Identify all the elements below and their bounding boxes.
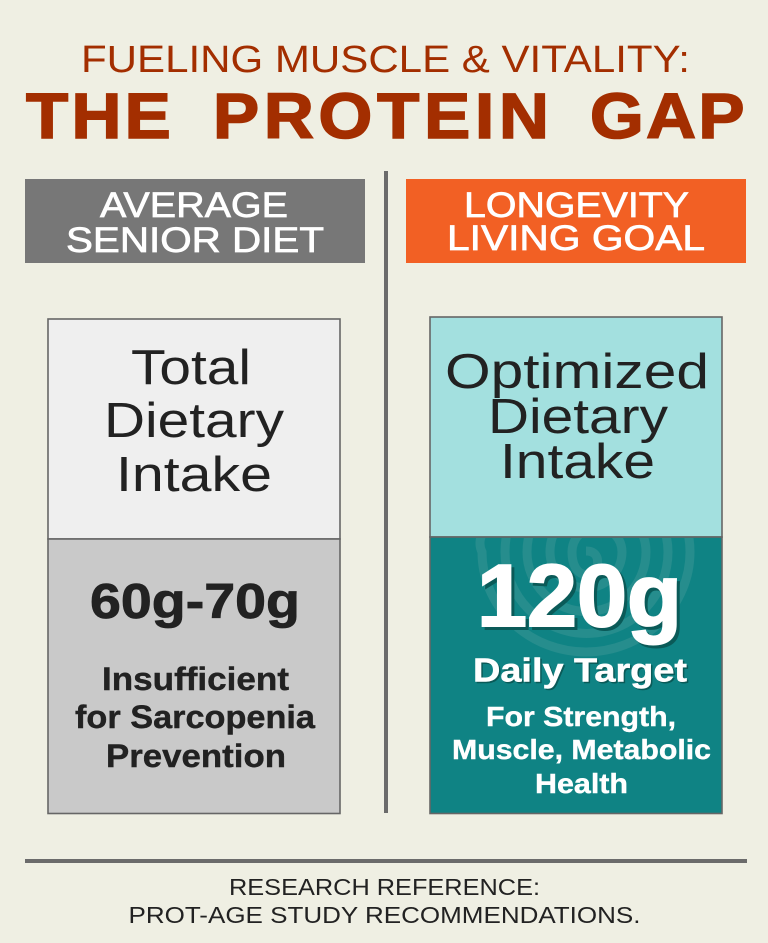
panel: 120g daily target: Health xyxy=(535,768,628,799)
panel: 60g-70g insufficient: 60g-70g xyxy=(90,575,300,629)
panel: 60g-70g insufficient: Insufficient xyxy=(102,661,289,697)
daily target label: Daily Target xyxy=(474,653,689,690)
footer: research reference: RESEARCH REFERENCE: xyxy=(229,874,540,900)
panel: 60g-70g insufficient xyxy=(48,539,340,814)
title line: main heading: PROTEIN xyxy=(213,81,549,152)
icon: spiral watermark xyxy=(476,538,694,656)
panel: total dietary intake xyxy=(48,319,340,539)
panel: total dietary intake: Dietary xyxy=(104,394,285,448)
footer: research reference: PROT-AGE STUDY RECOMMENDATIONS. xyxy=(128,902,640,928)
panel: longevity living goal header: LIVING GOAL xyxy=(447,219,705,258)
panel: 120g daily target: Muscle, Metabolic xyxy=(452,734,711,765)
title xyxy=(26,39,744,152)
panel: average senior diet header xyxy=(25,179,365,263)
panel: 120g daily target xyxy=(429,536,723,814)
title line: main heading xyxy=(26,81,744,152)
panel: longevity living goal header xyxy=(406,179,746,263)
panel: 60g-70g insufficient: Prevention xyxy=(106,738,286,774)
divider: vertical xyxy=(384,171,388,813)
panel: total dietary intake: Total xyxy=(131,341,251,395)
big number shadow and text: 120g xyxy=(477,546,682,645)
footer: research reference xyxy=(128,874,640,928)
title line: subtitle: FUELING MUSCLE & VITALITY: xyxy=(81,39,690,81)
panel: average senior diet header: AVERAGE xyxy=(100,186,288,225)
title line: main heading: THE xyxy=(26,81,171,152)
panel: 60g-70g insufficient: for Sarcopenia xyxy=(75,699,315,735)
title line: main heading: GAP xyxy=(590,81,744,152)
panel: optimized dietary intake: Dietary xyxy=(488,390,669,444)
panel: total dietary intake: Intake xyxy=(116,448,272,502)
panel: optimized dietary intake: Intake xyxy=(500,435,655,489)
big number shadow and text: 120g xyxy=(480,549,685,648)
panel: optimized dietary intake xyxy=(430,317,722,537)
panel: average senior diet header: SENIOR DIET xyxy=(66,221,324,260)
divider: footer rule xyxy=(25,859,747,863)
panel: 120g daily target: For Strength, xyxy=(486,701,676,732)
daily target label: Daily Target xyxy=(473,652,687,688)
panel: longevity living goal header: LONGEVITY xyxy=(464,186,689,225)
panel: optimized dietary intake: Optimized xyxy=(445,345,709,399)
